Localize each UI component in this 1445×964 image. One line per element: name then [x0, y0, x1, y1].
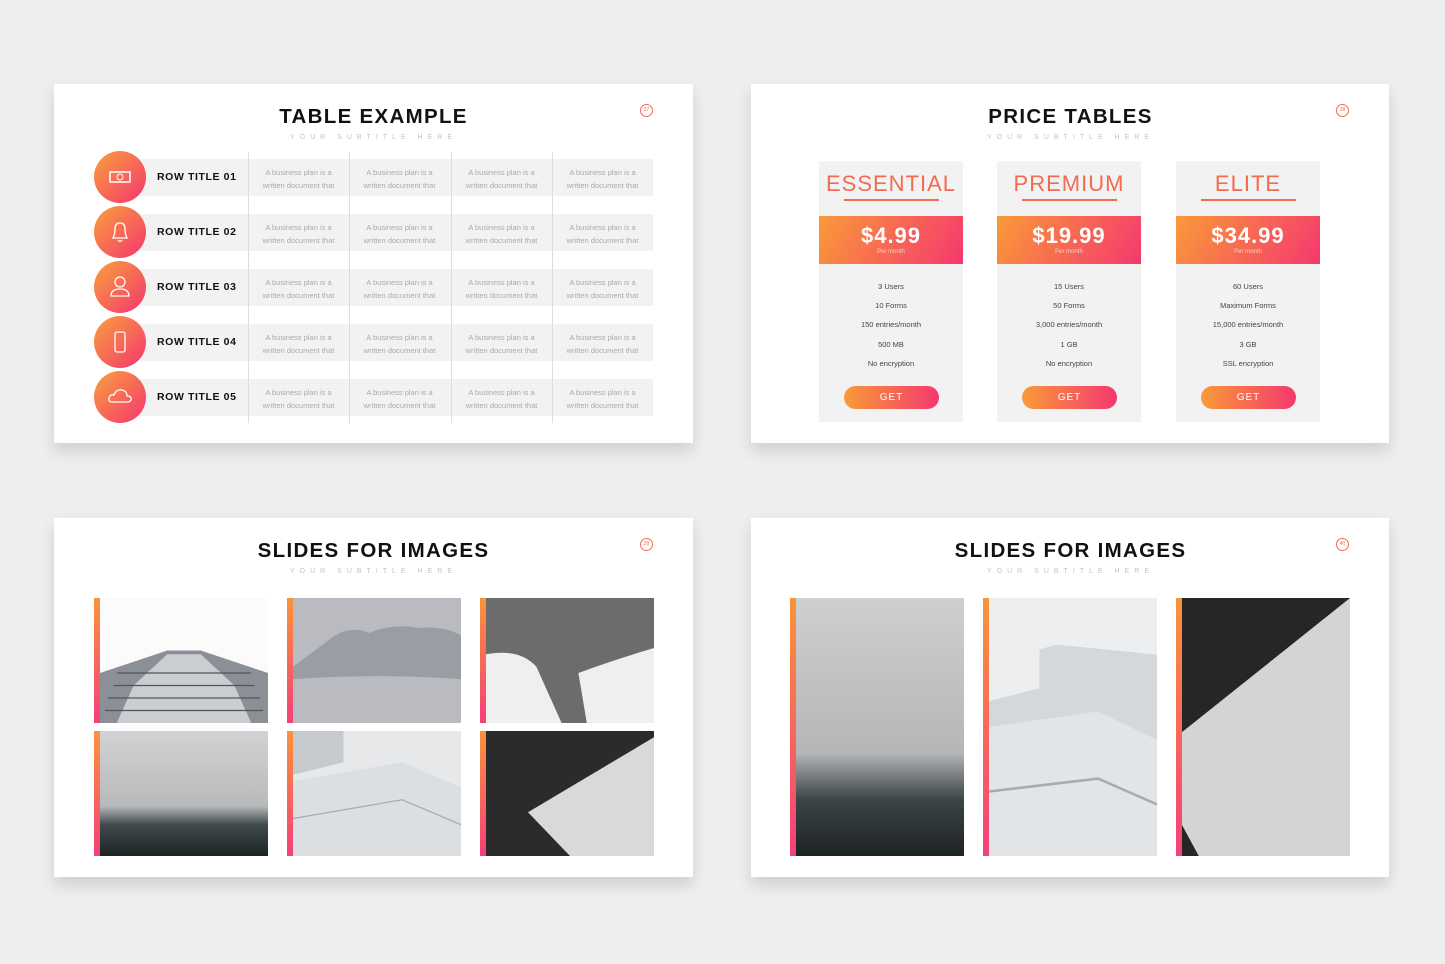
table cells: A business plan is a	[468, 333, 535, 342]
table cells: written document that	[364, 236, 435, 245]
card: essential: 10 Forms	[875, 301, 907, 310]
table cells: written document that	[466, 291, 537, 300]
card: elite: $34.99	[1211, 223, 1285, 248]
title: SLIDES FOR IMAGES	[258, 539, 489, 562]
image: rain on window	[94, 731, 268, 856]
table cells: written document that	[466, 236, 537, 245]
card: essential: 3 Users	[878, 282, 904, 291]
table cells: written document that	[364, 346, 435, 355]
page number	[640, 538, 653, 551]
card: premium: 15 Users	[1054, 282, 1084, 291]
page number: 39	[644, 541, 649, 547]
row title 02: ROW TITLE 02	[157, 226, 237, 238]
table cells: written document that	[263, 291, 334, 300]
table cells: written document that	[567, 181, 638, 190]
row title 01: ROW TITLE 01	[157, 171, 237, 183]
card: premium: 1 GB	[1060, 340, 1078, 349]
card: essential: ESSENTIAL	[826, 171, 956, 196]
subtitle: YOUR SUBTITLE HERE	[987, 568, 1154, 575]
image: leaf shadows	[480, 598, 654, 723]
table cells: A business plan is a	[366, 168, 433, 177]
table cells: written document that	[567, 346, 638, 355]
image: white building	[983, 598, 1157, 856]
row title 04: ROW TITLE 04	[157, 336, 237, 348]
table cells: written document that	[364, 291, 435, 300]
table cells: A business plan is a	[569, 278, 636, 287]
card: elite: Per month	[1234, 249, 1262, 255]
image: skyscraper	[94, 598, 268, 723]
page number	[640, 104, 653, 117]
table cells: A business plan is a	[265, 388, 332, 397]
card: essential: GET	[880, 392, 903, 403]
title: PRICE TABLES	[988, 105, 1153, 128]
table cells: A business plan is a	[468, 278, 535, 287]
table cells: written document that	[567, 236, 638, 245]
table cells: A business plan is a	[265, 278, 332, 287]
subtitle: YOUR SUBTITLE HERE	[290, 568, 457, 575]
card: premium: 3,000 entries/month	[1036, 320, 1102, 329]
table cells	[262, 168, 638, 410]
title: SLIDES FOR IMAGES	[955, 539, 1186, 562]
image: foggy forest	[287, 598, 461, 723]
table cells: A business plan is a	[569, 168, 636, 177]
table cells: A business plan is a	[366, 388, 433, 397]
card: essential: $4.99	[861, 223, 921, 248]
page number	[1336, 104, 1349, 117]
card: premium: No encryption	[1046, 359, 1092, 368]
card: elite: ELITE	[1215, 171, 1281, 196]
table cells: A business plan is a	[366, 223, 433, 232]
card: elite: GET	[1237, 392, 1260, 403]
icon: bell	[94, 206, 146, 258]
table cells: A business plan is a	[569, 388, 636, 397]
table cells: A business plan is a	[366, 333, 433, 342]
table cells: written document that	[364, 401, 435, 410]
table cells: written document that	[466, 346, 537, 355]
slide: slides for images (3 tall)	[751, 518, 1389, 877]
page number: 37	[644, 107, 649, 113]
table cells: written document that	[567, 401, 638, 410]
card: elite: 15,000 entries/month	[1213, 320, 1283, 329]
table cells: A business plan is a	[569, 223, 636, 232]
table cells: written document that	[567, 291, 638, 300]
table cells: A business plan is a	[468, 388, 535, 397]
card: premium: $19.99	[1032, 223, 1106, 248]
subtitle: YOUR SUBTITLE HERE	[290, 134, 457, 141]
table cells: written document that	[466, 181, 537, 190]
card: elite: Maximum Forms	[1220, 301, 1276, 310]
slide: table example	[54, 84, 693, 443]
page number	[1336, 538, 1349, 551]
card: premium: GET	[1058, 392, 1081, 403]
table cells: A business plan is a	[265, 223, 332, 232]
card: essential: 500 MB	[878, 340, 904, 349]
table cells: written document that	[263, 236, 334, 245]
table cells: written document that	[263, 401, 334, 410]
icon: money	[94, 151, 146, 203]
card: essential: No encryption	[868, 359, 914, 368]
card: premium: PREMIUM	[1014, 171, 1124, 196]
page number: 38	[1340, 107, 1345, 113]
title: TABLE EXAMPLE	[279, 105, 468, 128]
row title 03: ROW TITLE 03	[157, 281, 237, 293]
table cells: written document that	[263, 181, 334, 190]
table cells: A business plan is a	[468, 223, 535, 232]
table cells: A business plan is a	[366, 278, 433, 287]
image: white building	[287, 731, 461, 856]
table cells: written document that	[263, 346, 334, 355]
slide: slides for images (6 grid)	[54, 518, 693, 877]
card: essential: Per month	[877, 249, 905, 255]
icon: cloud	[94, 371, 146, 423]
subtitle: YOUR SUBTITLE HERE	[987, 134, 1154, 141]
image: rain on window	[790, 598, 964, 856]
page number: 40	[1340, 541, 1345, 547]
table cells: A business plan is a	[569, 333, 636, 342]
card: premium: 50 Forms	[1053, 301, 1085, 310]
table cells: written document that	[364, 181, 435, 190]
card: elite	[1176, 161, 1320, 422]
row title 05: ROW TITLE 05	[157, 391, 237, 403]
card: essential: 150 entries/month	[861, 320, 921, 329]
table cells: A business plan is a	[468, 168, 535, 177]
card: premium: Per month	[1055, 249, 1083, 255]
card: essential	[819, 161, 963, 422]
table cells: A business plan is a	[265, 168, 332, 177]
card: elite: 3 GB	[1239, 340, 1257, 349]
card: elite: 60 Users	[1233, 282, 1263, 291]
icon: users	[94, 261, 146, 313]
table cells: A business plan is a	[265, 333, 332, 342]
card: elite: SSL encryption	[1223, 359, 1273, 368]
slide: price tables	[751, 84, 1389, 443]
image: dark geometry	[480, 731, 654, 856]
table cells: written document that	[466, 401, 537, 410]
card: premium	[997, 161, 1141, 422]
image: dark geometry	[1176, 598, 1350, 856]
icon: phone	[94, 316, 146, 368]
